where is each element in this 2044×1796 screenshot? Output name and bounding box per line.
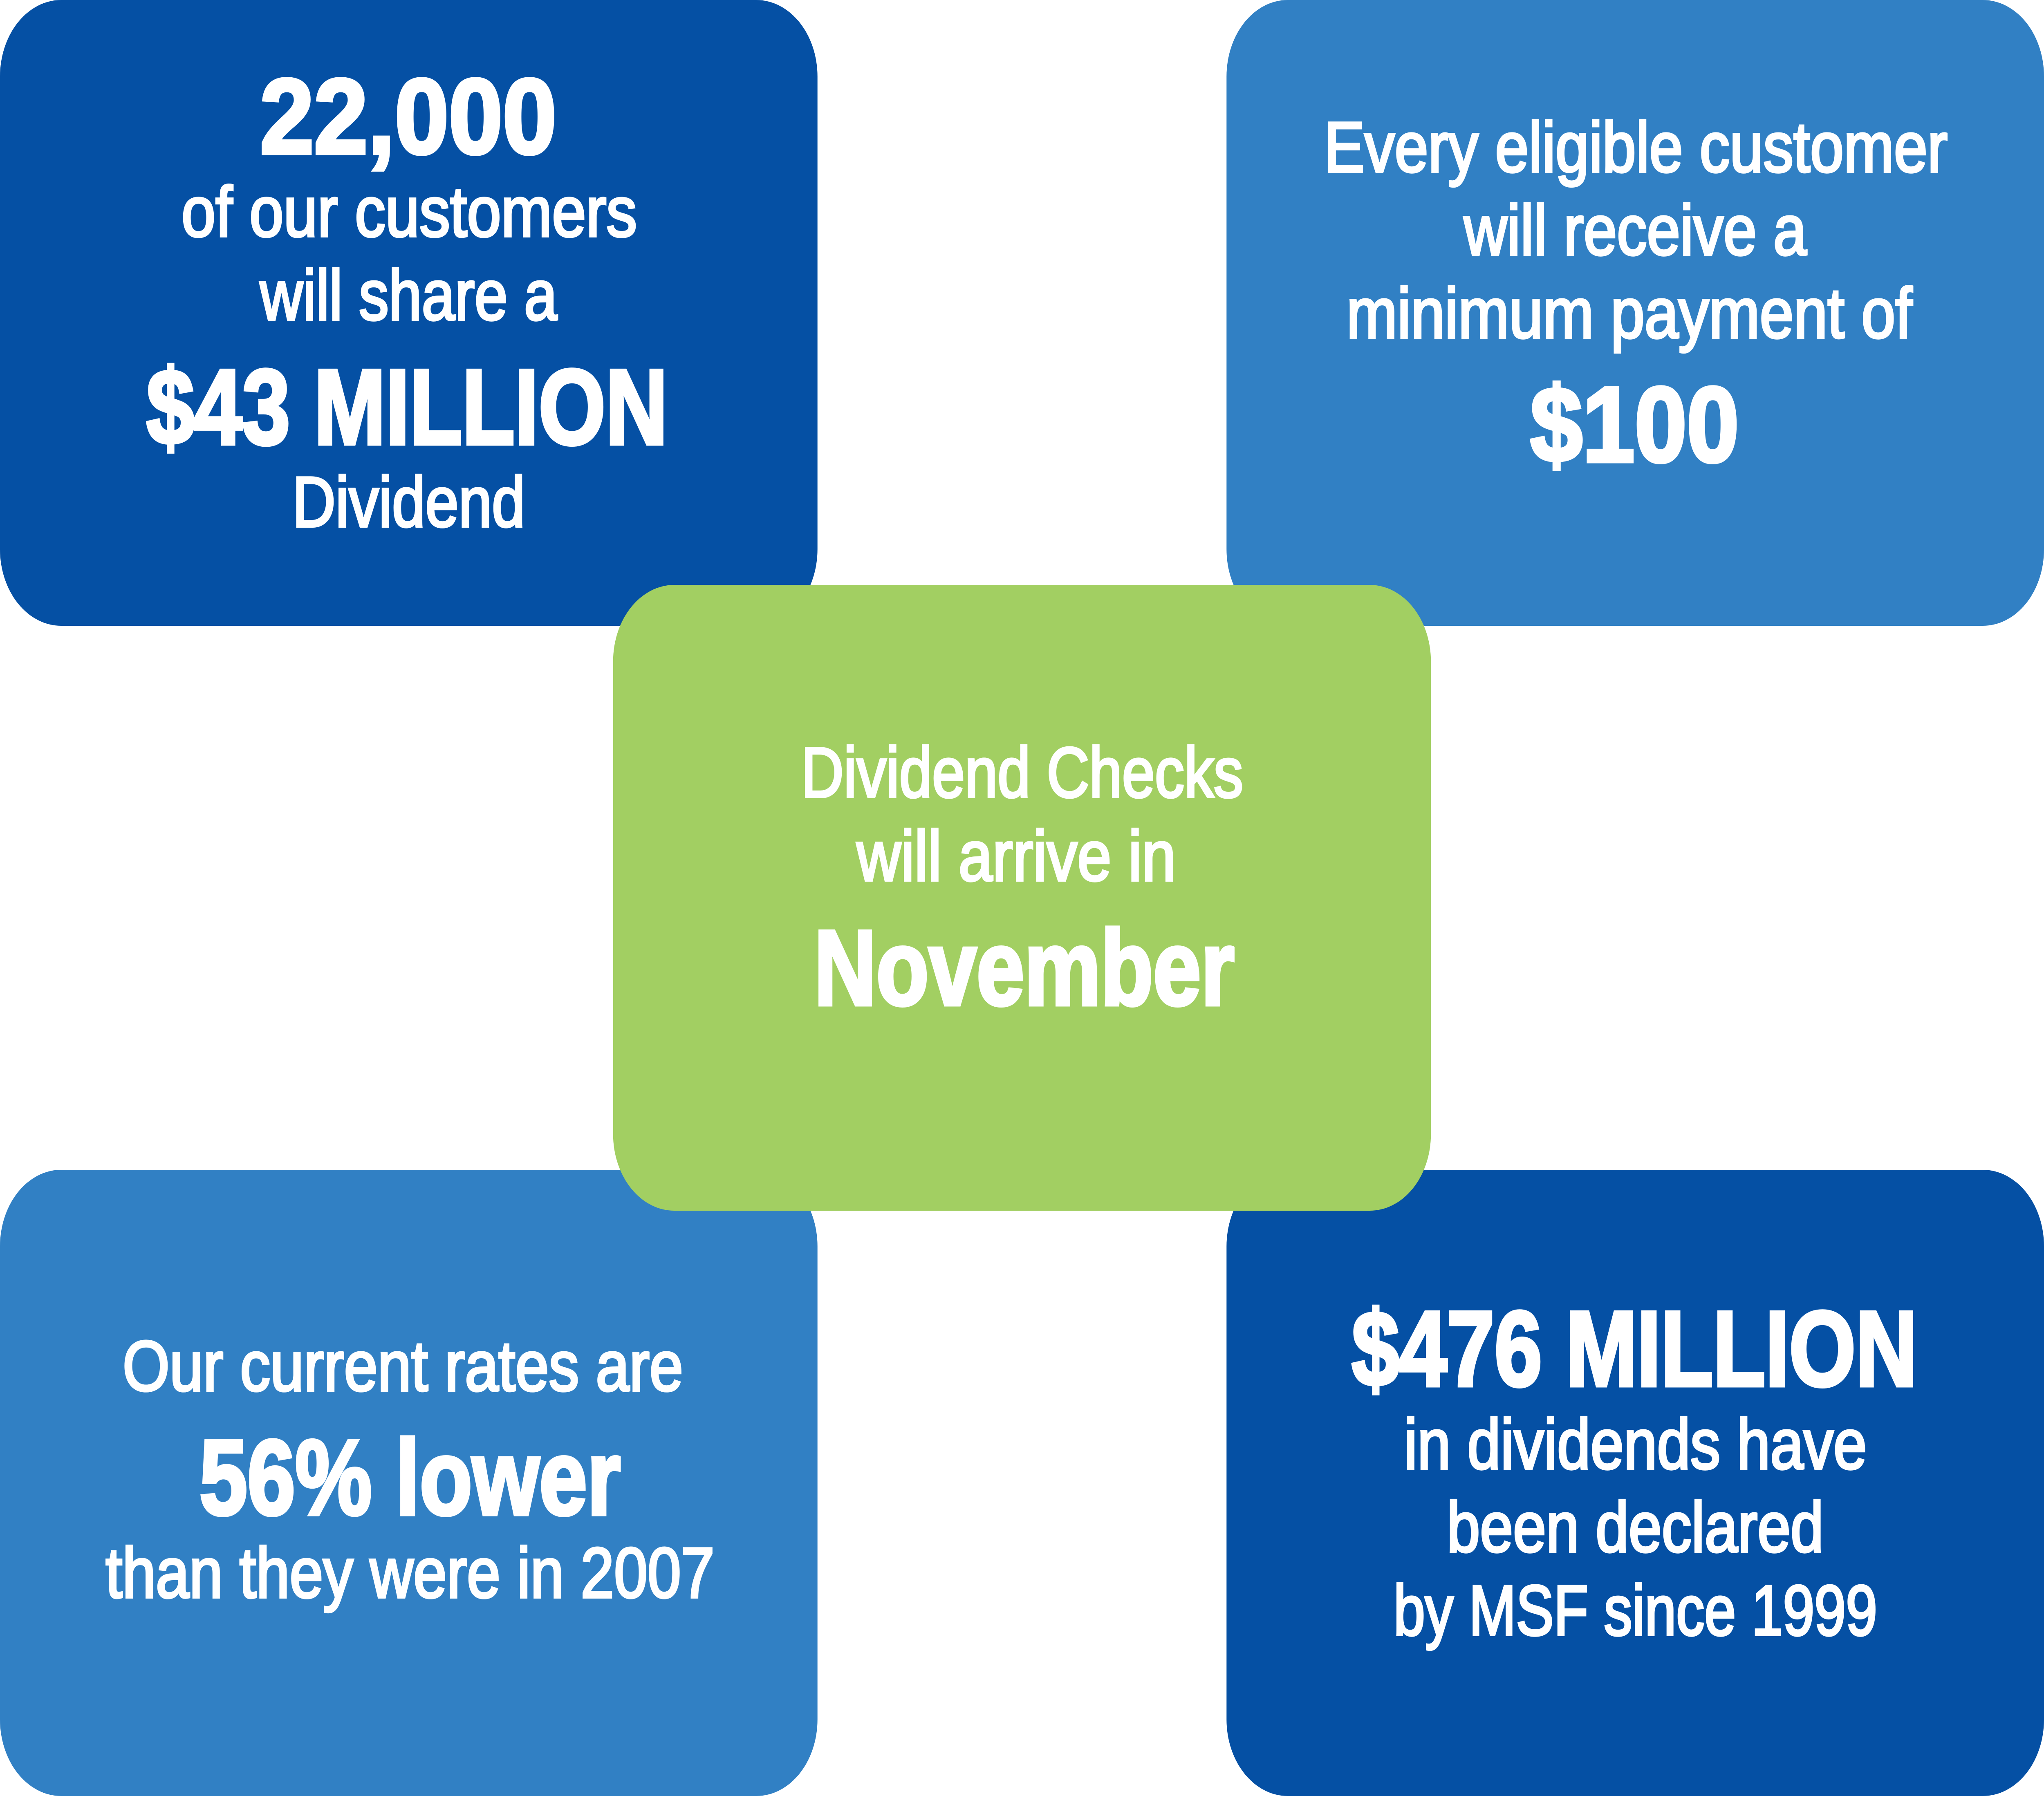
text: Every eligible customer: Every eligible customer bbox=[1324, 107, 1948, 187]
panel: center November bbox=[613, 585, 1431, 1211]
text: Our current rates are: Our current rates are bbox=[123, 1326, 683, 1406]
text: will receive a: will receive a bbox=[1464, 190, 1807, 270]
big number: 56% lower: 56% lower bbox=[199, 1418, 621, 1537]
big number: $43 MILLION: $43 MILLION bbox=[146, 348, 668, 467]
panel: minimum payment bbox=[1226, 0, 2044, 626]
panel background mid blue bbox=[1226, 0, 2044, 626]
text: of our customers: of our customers bbox=[182, 172, 637, 252]
heading: November: November bbox=[814, 909, 1235, 1028]
big number: 22,000: 22,000 bbox=[260, 57, 556, 176]
text: Dividend: Dividend bbox=[292, 462, 525, 542]
text: been declared: been declared bbox=[1447, 1487, 1824, 1567]
panel background green bbox=[613, 585, 1431, 1211]
text: by MSF since 1999: by MSF since 1999 bbox=[1394, 1571, 1877, 1650]
panel: 22,000 customers bbox=[0, 0, 818, 626]
text: in dividends have: in dividends have bbox=[1404, 1404, 1867, 1484]
panel background dark blue bbox=[0, 0, 818, 626]
panel background dark blue bbox=[1226, 1170, 2044, 1796]
panel: dividends declared bbox=[1226, 1170, 2044, 1796]
panel background mid blue bbox=[0, 1170, 818, 1796]
panel: lower rates bbox=[0, 1170, 818, 1796]
text: will share a: will share a bbox=[260, 255, 557, 335]
text: Dividend Checks: Dividend Checks bbox=[801, 733, 1243, 813]
big number: $100: $100 bbox=[1530, 365, 1739, 484]
big number: $476 MILLION: $476 MILLION bbox=[1352, 1290, 1917, 1409]
text: than they were in 2007: than they were in 2007 bbox=[105, 1533, 715, 1613]
text: will arrive in: will arrive in bbox=[856, 816, 1176, 896]
text: minimum payment of: minimum payment of bbox=[1347, 273, 1912, 353]
